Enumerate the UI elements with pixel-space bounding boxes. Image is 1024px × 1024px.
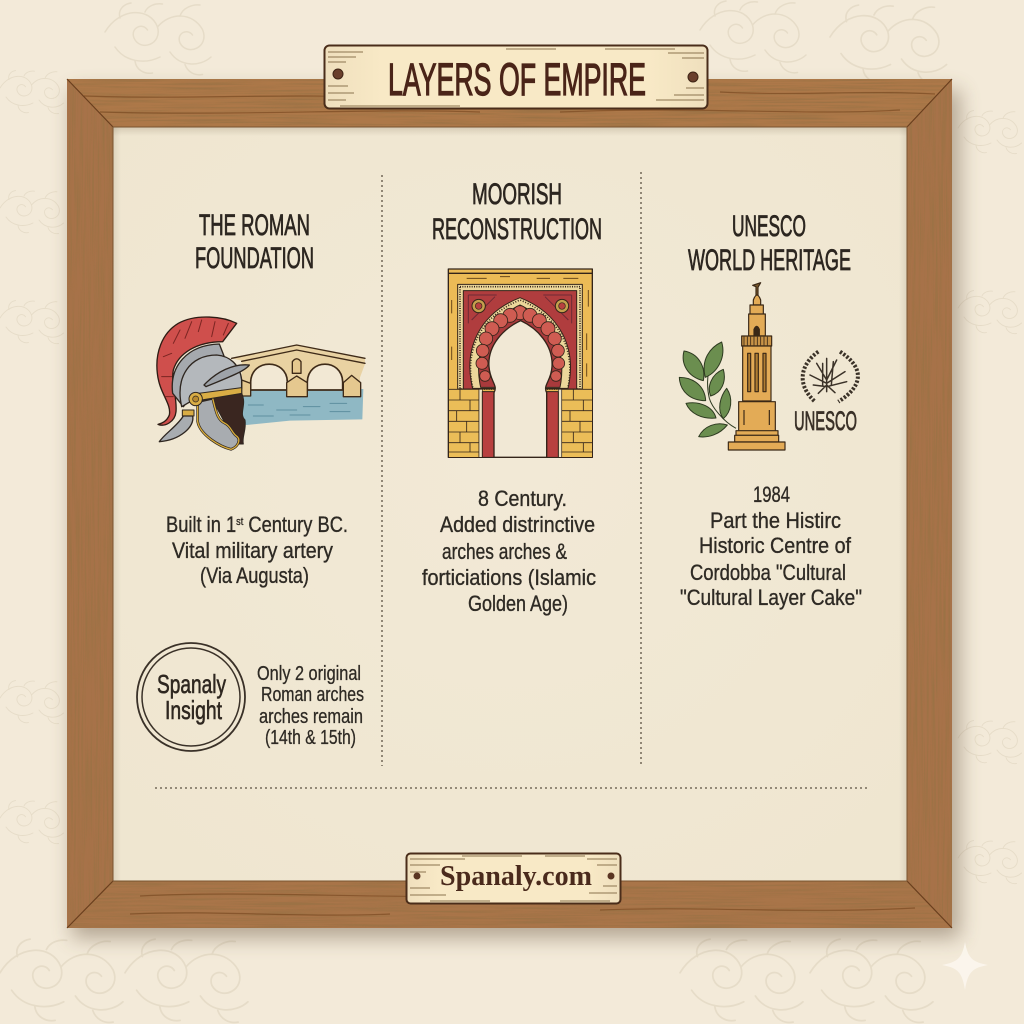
footer text: Spanaly.com (440, 860, 592, 892)
panel: unesco world heritage (679, 210, 862, 610)
heading: moorish reconstruction (432, 178, 602, 246)
icon: tower (728, 283, 785, 450)
icon: olive branch (679, 342, 736, 437)
text: moorish description: arches arches & (442, 539, 567, 564)
text: insight detail: Only 2 original (257, 663, 361, 685)
heading: moorish reconstruction: RECONSTRUCTION (432, 213, 602, 246)
icon: moorish arch (448, 269, 592, 457)
nail right (688, 72, 698, 82)
text: unesco description (680, 482, 862, 610)
text: unesco description: Historic Centre of (699, 533, 852, 558)
text: roman description: st (236, 516, 243, 528)
panel: moorish reconstruction (422, 178, 602, 616)
text: unesco label: UNESCO (794, 406, 857, 436)
icon: helmet and bridge (157, 317, 365, 449)
text: moorish description: 8 Century. (478, 486, 567, 511)
callout: spanaly insight: Spanaly (157, 669, 226, 699)
callout: spanaly insight: Insight (165, 695, 223, 725)
text: moorish description (422, 486, 596, 616)
icon: unesco wreath (803, 352, 858, 402)
nail left (414, 872, 420, 880)
nail right (608, 872, 614, 880)
wooden frame (67, 79, 952, 928)
heading: the roman foundation (195, 209, 314, 275)
text: insight detail (257, 663, 364, 749)
nail left (333, 69, 343, 79)
text: moorish description: Golden Age) (468, 591, 568, 616)
frame shadow (72, 90, 960, 938)
text: moorish description: forticiations (Islamic (422, 565, 596, 590)
text: insight detail: Roman arches (261, 684, 364, 706)
text: roman description (166, 512, 348, 588)
text: roman description: Built in 1 (166, 512, 250, 537)
heading: unesco world heritage: WORLD HERITAGE (688, 244, 851, 277)
heading: unesco world heritage (688, 210, 851, 277)
text: unesco description: 1984 (753, 482, 790, 507)
heading: the roman foundation: THE ROMAN (199, 209, 310, 242)
heading: the roman foundation: FOUNDATION (195, 242, 314, 275)
footer plaque (406, 854, 620, 904)
icon: sparkle (942, 942, 988, 990)
title plaque (324, 46, 708, 108)
heading: moorish reconstruction: MOORISH (472, 178, 562, 211)
text: roman description: Vital military artery (172, 538, 333, 563)
title text: LAYERS OF EMPIRE (388, 54, 646, 105)
callout: spanaly insight (137, 643, 245, 751)
text: insight detail: arches remain (259, 706, 363, 728)
text: roman description: Century BC. (243, 512, 348, 537)
text: unesco description: Cordobba "Cultural (690, 560, 846, 585)
text: unesco description: Part the Histirc (710, 508, 841, 533)
text: unesco description: "Cultural Layer Cake" (680, 585, 862, 610)
text: insight detail: (14th & 15th) (265, 727, 356, 749)
text: moorish description: Added distrinctive (440, 512, 595, 537)
text: roman description: (Via Augusta) (200, 563, 309, 588)
heading: unesco world heritage: UNESCO (732, 210, 806, 243)
panel: roman foundation (137, 209, 365, 751)
column dividers (155, 172, 868, 788)
